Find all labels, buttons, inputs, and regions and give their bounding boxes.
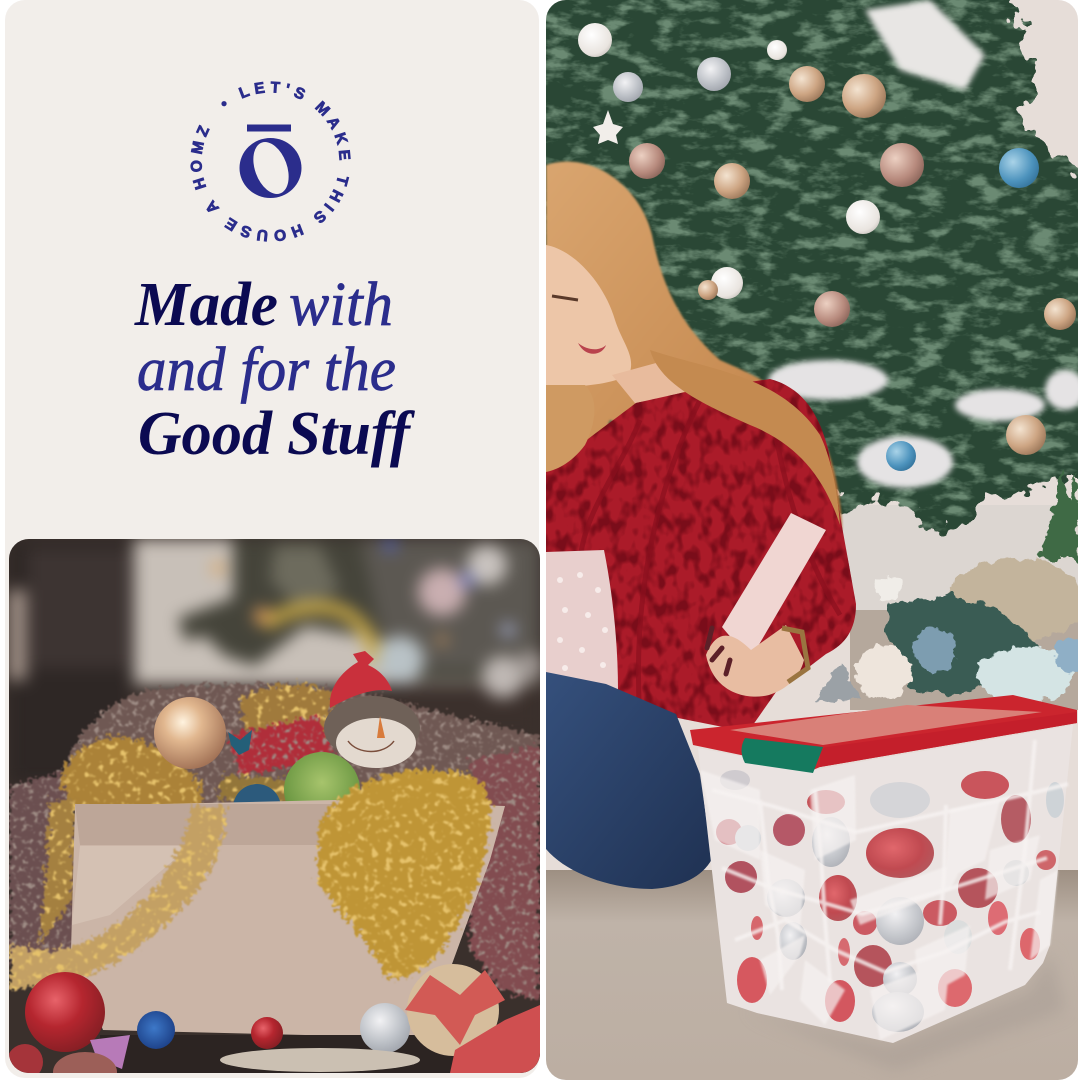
logo: circular Homz badge: • LET'S MAKE THIS HOUSE A HOMZ	[190, 81, 351, 242]
gold tinsel cluster	[318, 769, 491, 978]
ornament: gold bauble	[154, 697, 226, 769]
gold tinsel strand	[9, 806, 226, 990]
butterfly	[228, 730, 252, 755]
hair strands over sweater and left	[650, 350, 840, 525]
woman	[546, 161, 856, 889]
hair back	[546, 161, 842, 530]
blurred background: wall, furniture, tree	[9, 539, 544, 784]
title: Made with and for the Good Stuff: and for the	[137, 336, 396, 404]
ornaments in front	[7, 964, 540, 1080]
hand	[706, 625, 804, 697]
stored ornaments	[716, 770, 1064, 1032]
photo: woman with ornament storage box	[520, 0, 1080, 1080]
christmas tree	[520, 0, 1080, 535]
title: Made with and for the Good Stuff: with	[289, 271, 393, 339]
title: Made with and for the Good Stuff: Made	[134, 271, 278, 339]
title: Made with and for the Good Stuff	[134, 271, 415, 468]
snowman toy	[324, 651, 420, 768]
tree ornaments	[578, 23, 1076, 471]
flower arrangement	[812, 470, 1080, 703]
box lid	[690, 695, 1077, 770]
red sweater	[546, 379, 856, 732]
title: Made with and for the Good Stuff: Good Stuff	[138, 400, 415, 468]
box dividers	[700, 770, 1058, 1040]
ornament: blue bauble	[234, 784, 280, 802]
face	[546, 245, 631, 390]
jeans	[546, 672, 712, 889]
green latch	[742, 738, 823, 773]
milky veil over ornaments	[706, 771, 1056, 1032]
tinsel behind box	[9, 684, 540, 1000]
box shadow on floor	[845, 972, 1058, 1065]
ornament: green bauble	[284, 752, 360, 802]
storage box	[690, 695, 1077, 1071]
cardboard box	[71, 800, 505, 1038]
box body	[704, 799, 1058, 1043]
panel: left cream card	[5, 0, 539, 1078]
gift box base	[546, 550, 618, 690]
gift lid	[722, 513, 826, 660]
photo: box of tinsel and ornaments	[7, 539, 544, 1080]
